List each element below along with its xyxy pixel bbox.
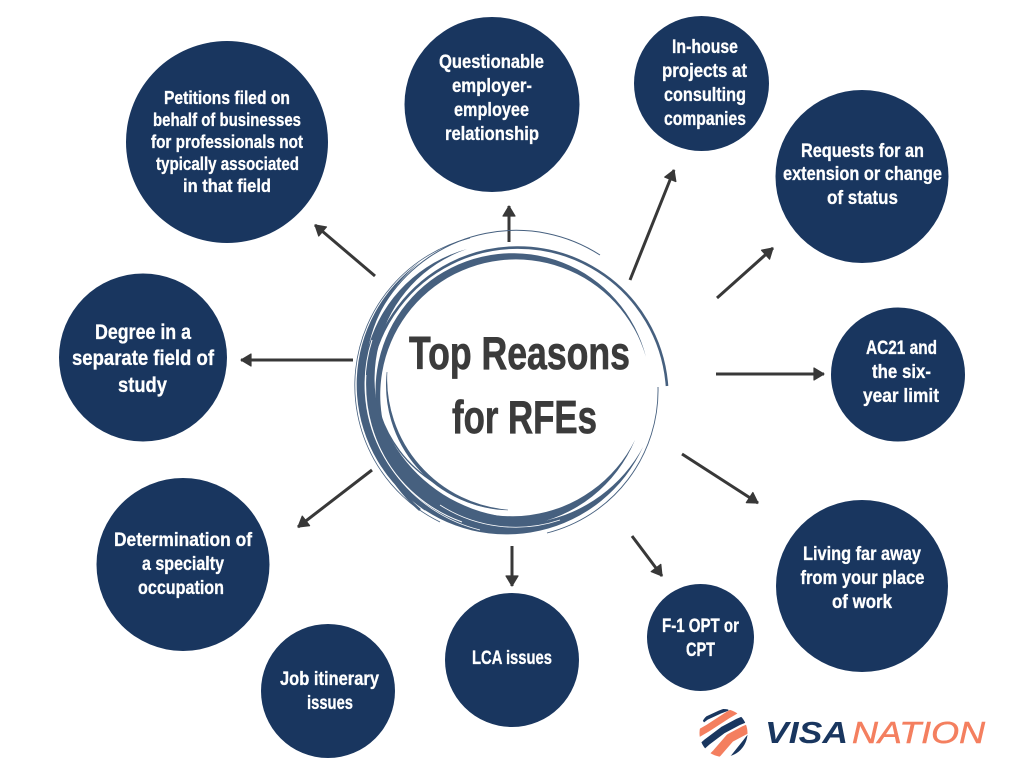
title: Top Reasons [409, 327, 630, 379]
circle: F-1 OPT or CPT: F-1 OPT or [662, 616, 739, 637]
circle: living far away: Living far away [803, 544, 921, 565]
circle: in-house projects: companies [664, 109, 746, 130]
circle: living far away [776, 500, 948, 672]
central brush-stroke ring [355, 230, 667, 534]
circle: AC21 [831, 308, 965, 442]
circle: AC21: the six- [872, 362, 931, 383]
arrow: to living far away [682, 454, 758, 503]
circle: job itinerary: Job itinerary [280, 669, 379, 690]
logo: VisaNation: NATION [852, 715, 986, 750]
circle: petitions: in that field [183, 176, 271, 196]
circle: petitions [126, 41, 328, 243]
arrow: to AC21 [716, 372, 824, 376]
circle: in-house projects: In-house [672, 37, 738, 58]
circle: employer-employee relationship [404, 17, 580, 192]
circle: extension or change of status: Requests for an [801, 141, 924, 162]
circle: petitions: for professionals not [151, 132, 303, 152]
circle: extension or change of status [776, 90, 948, 263]
icon: striped globe [700, 709, 748, 757]
circle: in-house projects: consulting [664, 85, 746, 106]
logo: VisaNation [700, 709, 986, 757]
circle: F-1 OPT or CPT [647, 584, 754, 691]
circle: petitions: behalf of businesses [153, 110, 301, 130]
circle: AC21: AC21 and [866, 338, 937, 359]
circle: AC21: year limit [863, 386, 940, 407]
circle: job itinerary: issues [307, 693, 353, 714]
circle: F-1 OPT or CPT: CPT [686, 640, 715, 661]
arrow: to employer-employee relationship [508, 206, 510, 242]
circle: job itinerary [261, 624, 395, 758]
circle: employer-employee relationship: employee [454, 100, 529, 121]
circle: living far away: of work [832, 592, 892, 613]
title: for RFEs [452, 391, 597, 443]
circle: employer-employee relationship: Questionable [439, 52, 544, 73]
arrow: to F-1 OPT [632, 536, 662, 576]
title [409, 327, 630, 443]
circle: in-house projects [634, 16, 769, 151]
arrow: to degree [241, 358, 353, 362]
circle: in-house projects: projects at [662, 61, 748, 82]
arrow: to in-house projects [630, 170, 674, 280]
circle: employer-employee relationship: employer- [452, 76, 532, 97]
arrow: to extension or change of status [717, 248, 773, 298]
circle: degree in a separate field: study [118, 374, 167, 397]
arrow: to specialty occupation [298, 470, 372, 527]
circle: petitions: Petitions filed on [164, 88, 290, 108]
circle: employer-employee relationship: relationship [445, 124, 539, 145]
circle: LCA issues [445, 593, 579, 727]
arrow: to petitions [315, 225, 375, 276]
circle: LCA issues: LCA issues [472, 648, 552, 669]
circle: degree in a separate field: separate field of [72, 347, 215, 370]
circle: specialty occupation: a specialty [142, 554, 224, 575]
wordmark: VISA [765, 715, 848, 750]
circle: petitions: typically associated [156, 154, 299, 174]
arrow: to LCA issues [510, 546, 514, 586]
circle: extension or change of status: of status [827, 188, 898, 209]
circle: degree in a separate field: Degree in a [95, 321, 191, 344]
circle: living far away: from your place [800, 568, 924, 589]
circle: specialty occupation: occupation [138, 578, 224, 599]
circle: specialty occupation [96, 478, 270, 651]
circle: specialty occupation: Determination of [114, 530, 253, 551]
circle: degree in a separate field [59, 274, 227, 442]
circle: extension or change of status: extension or change [783, 164, 942, 185]
